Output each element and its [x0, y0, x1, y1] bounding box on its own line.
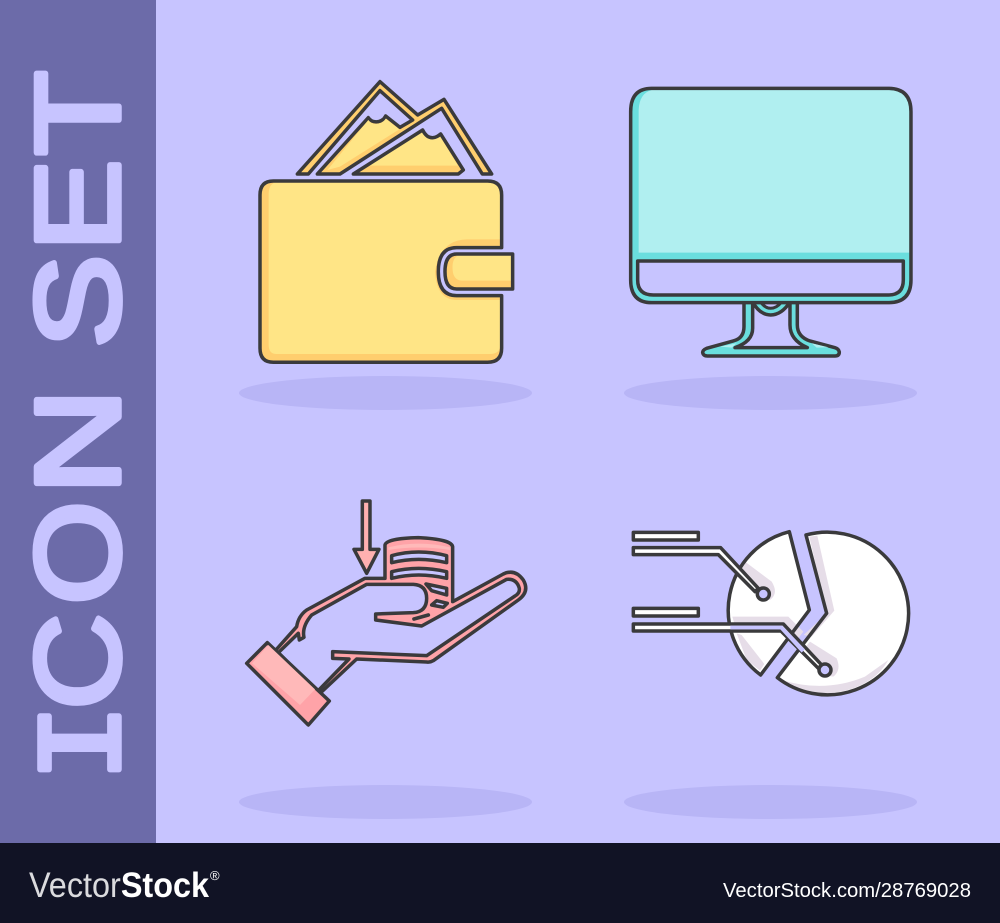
sidebar title: ICON SET: I: [19, 703, 155, 782]
sidebar title: ICON SET: E: [11, 159, 145, 251]
wallet clasp: [445, 254, 513, 289]
sidebar title: ICON SET: C: [10, 613, 145, 710]
wallet body: [260, 181, 502, 362]
sidebar title: ICON SET: [10, 71, 155, 782]
ground shadows: [239, 376, 917, 819]
hand and coin stack: [275, 538, 526, 693]
monitor stand: [703, 300, 839, 356]
sidebar title: ICON SET: T: [10, 71, 145, 156]
chart leader lines: [633, 532, 831, 676]
sidebar title: ICON SET: S: [11, 254, 145, 348]
icon: wallet with banknotes: [260, 82, 513, 362]
icon: pie chart with leaders: [633, 532, 909, 695]
banknotes: [297, 82, 492, 174]
sidebar title: ICON SET: N: [10, 388, 145, 495]
monitor chin: [638, 261, 903, 295]
footer image id: VectorStock.com/28769028: [723, 880, 971, 902]
sidebar panel: [0, 0, 156, 843]
down arrow: [354, 501, 379, 573]
shirt cuff: [247, 643, 329, 725]
monitor body: [631, 88, 911, 303]
sidebar title: ICON SET: O: [10, 501, 145, 605]
icon: computer monitor: [631, 88, 911, 356]
footer bar: [0, 843, 1000, 923]
icon: hand receiving coins: [247, 501, 526, 725]
footer logo: VectorStock: [29, 866, 209, 905]
footer registered mark: ®: [210, 868, 220, 883]
pie slices: [728, 532, 909, 695]
